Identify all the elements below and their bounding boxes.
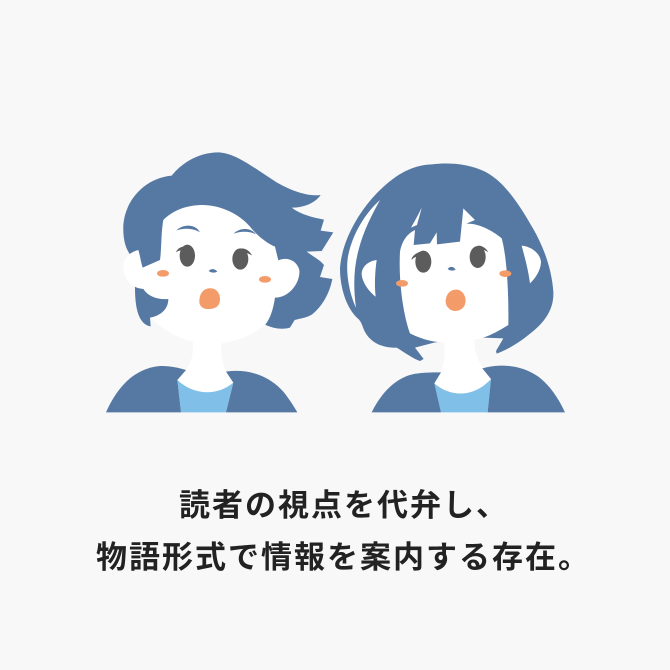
jacket right	[482, 366, 565, 412]
face, neck and ears	[123, 205, 299, 392]
left eye	[412, 251, 431, 273]
mouth	[446, 290, 466, 311]
mouth	[199, 288, 220, 309]
right eye	[470, 246, 488, 268]
caption line 1: 読者の視点を代弁し、	[179, 488, 509, 523]
shirt	[434, 379, 491, 412]
shirt	[177, 380, 233, 412]
face	[400, 208, 508, 342]
left cheek	[157, 270, 169, 277]
jacket left	[106, 366, 186, 412]
jacket left	[372, 372, 441, 412]
left cheek	[396, 280, 408, 287]
hair highlight	[347, 200, 380, 308]
right eye	[232, 248, 252, 270]
hair	[340, 163, 553, 361]
right cheek	[259, 276, 271, 283]
hair	[123, 152, 333, 329]
fringe sliver	[411, 208, 422, 228]
left ear	[362, 260, 377, 297]
left eye	[176, 245, 195, 267]
character: right person with bob hair	[340, 163, 565, 412]
left eyebrow	[176, 226, 200, 232]
character: left person with wavy hair	[106, 152, 333, 412]
right ear	[522, 246, 541, 283]
caption line 2: 物語形式で情報を案内する存在。	[96, 540, 591, 575]
nose	[448, 267, 456, 271]
right cheek	[499, 270, 511, 277]
right eyebrow	[234, 229, 256, 234]
nose	[209, 269, 217, 273]
jacket right	[226, 371, 297, 412]
neck	[434, 338, 491, 394]
